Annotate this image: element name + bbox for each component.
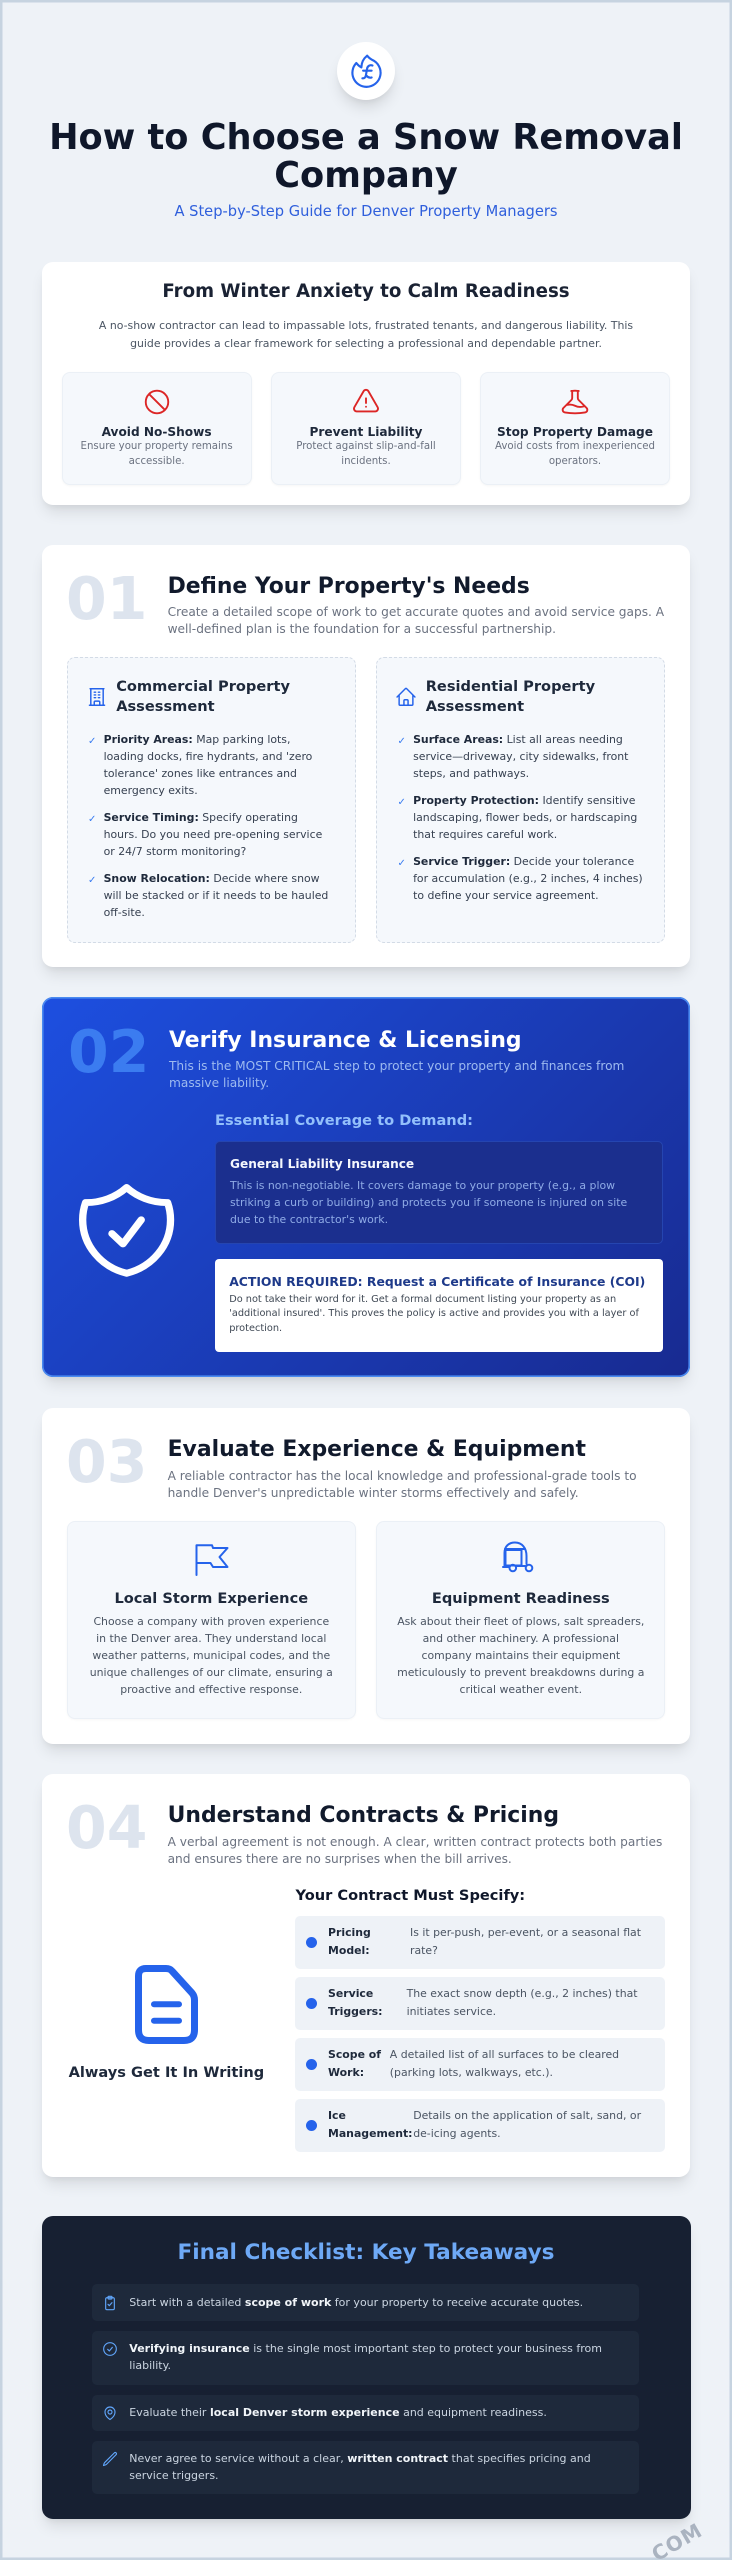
contract list heading: Your Contract Must Specify:	[296, 1887, 525, 1904]
intro text: guide provides a clear framework for selecting a professional and dependable partner.	[130, 337, 602, 350]
card title: Prevent Liability	[310, 425, 422, 439]
panel: step 03 evaluate experience and equipment	[42, 1408, 690, 1744]
checklist item: service timing: or 24/7 storm monitoring?	[104, 845, 246, 858]
icon: office building	[88, 688, 106, 706]
checklist item: priority areas: Priority Areas: Map parking lots,	[104, 733, 290, 746]
checklist item: surface areas: ✓	[397, 736, 406, 747]
heading: From Winter Anxiety to Calm Readiness	[162, 281, 570, 302]
checklist item: priority areas: ✓	[88, 736, 96, 747]
callout text	[230, 1179, 627, 1226]
takeaway row: verifying insurance	[92, 2331, 639, 2385]
panel: from winter anxiety to calm readiness	[42, 262, 690, 505]
icon: flask	[562, 390, 588, 414]
step description	[168, 1469, 637, 1500]
takeaway row: local experience	[92, 2395, 639, 2431]
contract row: ice management: Ice	[328, 2109, 346, 2122]
step number: 03	[66, 1428, 147, 1496]
callout: action required	[215, 1259, 663, 1352]
callout text: This is non-negotiable. It covers damage to your property (e.g., a plow	[230, 1179, 615, 1192]
checklist item: service timing: ✓	[88, 814, 96, 825]
icon: warning triangle	[353, 388, 379, 412]
box heading	[426, 678, 595, 715]
checklist item: property protection: ✓	[397, 797, 406, 808]
box heading: Assessment	[426, 698, 524, 715]
card text: Ask about their fleet of plows, salt spreaders,	[397, 1615, 644, 1628]
card text: company maintains their equipment	[421, 1649, 620, 1662]
card text	[495, 441, 655, 467]
card text: Choose a company with proven experience	[93, 1615, 329, 1628]
card text: incidents.	[341, 456, 391, 467]
takeaway row: scope of work	[92, 2284, 639, 2321]
contract row: pricing model: Pricing	[328, 1926, 371, 1939]
takeaway row: scope of work: Start with a detailed scope of work for your property to receive accurate quotes.	[129, 2296, 583, 2309]
panel: commercial property assessment	[67, 657, 356, 943]
callout text: protection.	[229, 1323, 282, 1334]
card text	[296, 441, 436, 467]
title: How to Choose a Snow Removal	[49, 117, 683, 158]
checklist item: surface areas: steps, and pathways.	[413, 767, 529, 780]
checklist item: service timing: hours. Do you need pre-opening service	[104, 828, 322, 841]
benefit card: avoid no-shows	[62, 372, 252, 485]
checklist item: property protection: landscaping, flower beds, or hardscaping	[413, 811, 637, 824]
checklist item: snow relocation: Snow Relocation: Decide where snow	[104, 872, 320, 885]
benefit card: prevent liability	[271, 372, 461, 485]
contract row: service triggers: Service	[328, 1987, 373, 2000]
checklist item: snow relocation: off-site.	[104, 906, 145, 919]
checklist item: priority areas: tolerance' zones like entrances and	[104, 767, 297, 780]
callout text: Do not take their word for it. Get a formal document listing your property as an	[229, 1294, 616, 1305]
contract row: scope of work: Work:	[328, 2066, 364, 2079]
intro text	[99, 319, 633, 350]
callout text: 'additional insured'. This proves the policy is active and provides you with a layer of	[229, 1308, 639, 1319]
contract row: pricing model	[295, 1916, 665, 1969]
checklist item: service timing	[88, 811, 322, 858]
checklist item: snow relocation: will be stacked or if it needs to be hauled	[104, 889, 328, 902]
step number: 04	[66, 1794, 147, 1862]
checklist item: service trigger: ✓	[397, 858, 406, 869]
contract row: scope of work: Scope of	[328, 2048, 381, 2061]
step description	[168, 1835, 662, 1866]
callout text	[229, 1294, 640, 1334]
takeaway row: verifying insurance: Verifying insurance is the single most important step to protect your business from	[129, 2342, 602, 2355]
checklist item: priority areas: loading docks, fire hydrants, and 'zero	[104, 750, 312, 763]
takeaway row: written contract: Never agree to service without a clear, written contract that specifies pricing and	[129, 2452, 591, 2465]
contract row: service triggers: The exact snow depth (e.g., 2 inches) that	[407, 1987, 638, 2000]
checklist item: snow relocation: ✓	[88, 875, 96, 886]
card title: Local Storm Experience	[114, 1590, 308, 1607]
contract row: ice management: Management:	[328, 2127, 413, 2140]
checklist item: property protection	[397, 794, 637, 841]
title: Company	[274, 155, 458, 196]
step heading: Understand Contracts & Pricing	[168, 1803, 559, 1828]
contract row: scope of work	[295, 2038, 665, 2091]
takeaway row: verifying insurance: liability.	[129, 2359, 171, 2372]
box heading	[116, 678, 290, 715]
callout heading: ACTION REQUIRED: Request a Certificate of Insurance (COI)	[229, 1274, 645, 1289]
card title: Equipment Readiness	[432, 1590, 610, 1607]
box heading: Commercial Property	[116, 678, 290, 695]
icon: no symbol	[144, 390, 170, 414]
panel: final checklist key takeaways	[42, 2216, 690, 2519]
panel: local storm experience	[67, 1521, 356, 1719]
callout: general liability insurance	[215, 1141, 663, 1244]
icon: house	[396, 688, 416, 706]
checklist item: service trigger: Service Trigger: Decide your tolerance	[413, 855, 634, 868]
checklist item: property protection: Property Protection: Identify sensitive	[413, 794, 635, 807]
contract row: pricing model: rate?	[410, 1944, 438, 1957]
card text: weather patterns, municipal codes, and the	[92, 1649, 330, 1662]
card text: unique challenges of our climate, ensuring a	[90, 1666, 333, 1679]
icon: shield check	[79, 1184, 174, 1277]
subtitle: A Step-by-Step Guide for Denver Property Managers	[174, 203, 558, 220]
card title: Avoid No-Shows	[102, 425, 212, 439]
intro text: A no-show contractor can lead to impassable lots, frustrated tenants, and dangerous liability. This	[99, 319, 633, 332]
takeaway row: written contract: service triggers.	[129, 2469, 219, 2482]
step number: 01	[66, 564, 147, 632]
callout text: striking a curb or building) and protects you if someone is injured on site	[230, 1196, 627, 1209]
coverage heading: Essential Coverage to Demand:	[215, 1112, 473, 1129]
step description: handle Denver's unpredictable winter storms effectively and safely.	[168, 1486, 579, 1500]
benefit card: stop property damage	[480, 372, 670, 485]
step heading: Evaluate Experience & Equipment	[168, 1437, 586, 1462]
card text: and other machinery. A professional	[423, 1632, 619, 1645]
step description: massive liability.	[169, 1076, 269, 1090]
title	[49, 117, 683, 196]
step number: 02	[68, 1018, 149, 1086]
box heading: Assessment	[116, 698, 215, 715]
card text: critical weather event.	[460, 1683, 582, 1696]
contract row: service triggers: Triggers:	[328, 2005, 383, 2018]
step description: and ensures there are no surprises when the bill arrives.	[168, 1852, 512, 1866]
contract row: pricing model: Model:	[328, 1944, 370, 1957]
panel: step 01 define your property's needs	[42, 545, 690, 967]
step description	[168, 605, 664, 636]
panel: commercial property assessment: emergency exits.	[104, 784, 198, 797]
step description: Create a detailed scope of work to get accurate quotes and avoid service gaps. A	[168, 605, 664, 619]
icon: snow plow truck	[502, 1542, 534, 1572]
step heading: Define Your Property's Needs	[168, 574, 530, 599]
step description	[168, 1059, 624, 1090]
checklist item: priority areas	[88, 733, 312, 797]
step description: A reliable contractor has the local knowledge and professional-grade tools to	[168, 1469, 637, 1483]
contract row: ice management	[295, 2099, 665, 2152]
checklist item: surface areas: service—driveway, city sidewalks, front	[413, 750, 628, 763]
checklist heading: Final Checklist: Key Takeaways	[177, 2240, 555, 2265]
card text	[397, 1615, 644, 1696]
card text: meticulously to prevent breakdowns during a	[397, 1666, 644, 1679]
step description: A verbal agreement is not enough. A clear, written contract protects both parties	[168, 1835, 662, 1849]
checklist item: snow relocation	[88, 872, 328, 919]
card text: accessible.	[129, 456, 185, 467]
panel: equipment readiness	[376, 1521, 665, 1719]
step description: well-defined plan is the foundation for a successful partnership.	[168, 622, 556, 636]
checklist item: surface areas	[397, 733, 628, 780]
contract row: service triggers: initiates service.	[407, 2005, 496, 2018]
card title: Stop Property Damage	[497, 425, 653, 439]
card text: Avoid costs from inexperienced	[495, 441, 655, 452]
card text	[81, 441, 233, 467]
card text: proactive and effective response.	[120, 1683, 302, 1696]
checklist item: service trigger: for accumulation (e.g., 2 inches, 4 inches)	[413, 872, 643, 885]
card text	[90, 1615, 333, 1696]
contract row: scope of work: (parking lots, walkways, etc.).	[390, 2066, 553, 2079]
icon: document	[135, 1965, 198, 2044]
callout text: due to the contractor's work.	[230, 1213, 388, 1226]
checklist item: service trigger	[397, 855, 643, 902]
contract row: ice management: Details on the application of salt, sand, or	[413, 2109, 641, 2122]
contract row: ice management: de-icing agents.	[413, 2127, 501, 2140]
icon: flame and wrench badge	[337, 42, 395, 100]
step description: This is the MOST CRITICAL step to protect your property and finances from	[169, 1059, 624, 1073]
takeaway row: local experience: Evaluate their local Denver storm experience and equipment readiness.	[129, 2406, 547, 2419]
checklist item: surface areas: Surface Areas: List all areas needing	[413, 733, 623, 746]
checklist item: service trigger: to define your service agreement.	[413, 889, 599, 902]
step heading: Verify Insurance & Licensing	[169, 1028, 522, 1053]
panel: step 02 verify insurance and licensing	[42, 997, 690, 1377]
panel: step 04 understand contracts and pricing	[42, 1774, 690, 2177]
contract row: scope of work: A detailed list of all surfaces to be cleared	[390, 2048, 619, 2061]
panel: residential property assessment	[376, 657, 665, 943]
box heading: Residential Property	[426, 678, 595, 695]
icon: flag	[196, 1544, 228, 1576]
callout heading: General Liability Insurance	[230, 1157, 414, 1171]
card text: Protect against slip-and-fall	[296, 441, 436, 452]
icon caption: Always Get It In Writing	[69, 2064, 264, 2081]
contract row: pricing model: Is it per-push, per-event, or a seasonal flat	[410, 1926, 641, 1939]
card text: in the Denver area. They understand local	[96, 1632, 326, 1645]
takeaway row: written contract	[92, 2441, 639, 2494]
contract row: service triggers	[295, 1977, 665, 2030]
checklist item: property protection: that requires careful work.	[413, 828, 557, 841]
checklist item: service timing: Service Timing: Specify operating	[104, 811, 298, 824]
card text: operators.	[549, 456, 601, 467]
card text: Ensure your property remains	[81, 441, 233, 452]
